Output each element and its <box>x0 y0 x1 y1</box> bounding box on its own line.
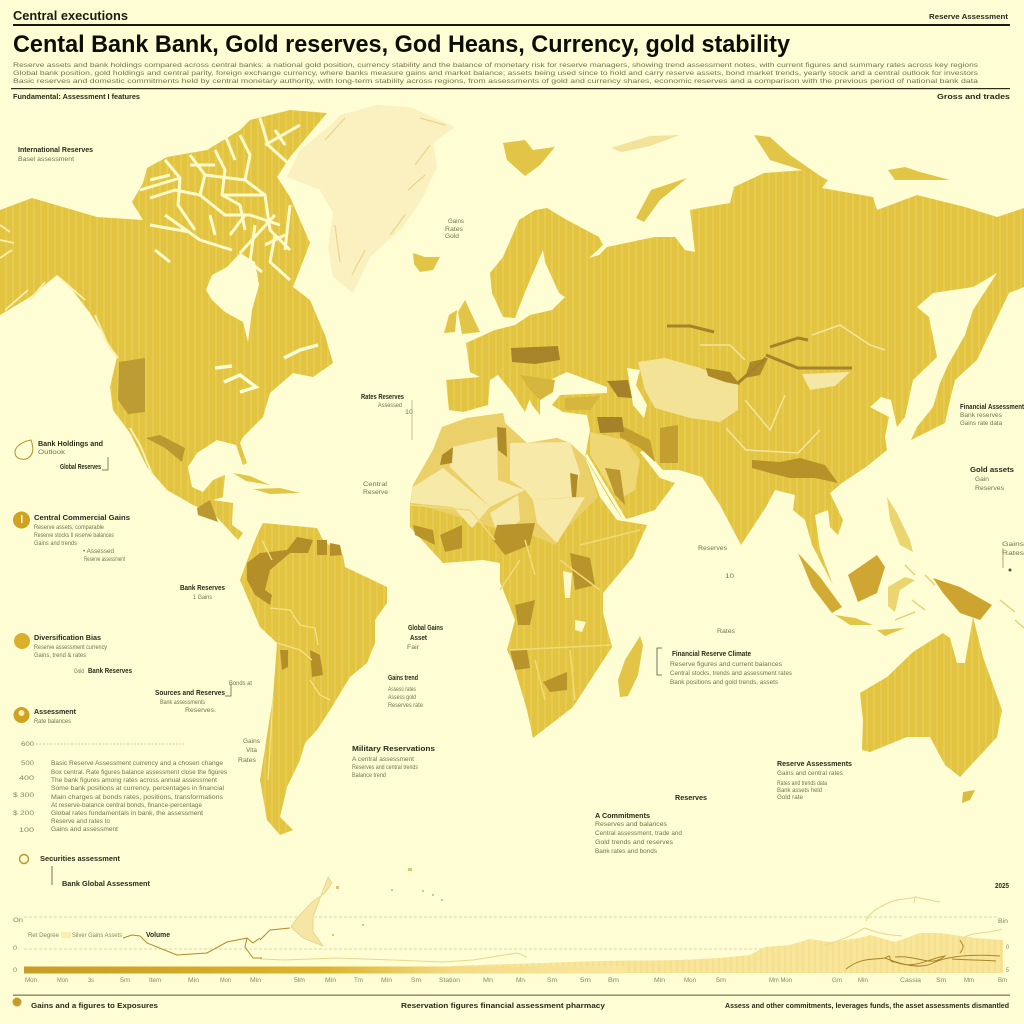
map: West and Central Africa relief <box>413 523 595 692</box>
map: Red Sea <box>586 455 625 520</box>
label: commitments: Bank rates and bonds <box>595 849 657 855</box>
scale values: 400 <box>19 776 35 782</box>
map: Africa western upland <box>412 413 598 545</box>
area series <box>450 933 1003 973</box>
label: bank reserves south america <box>180 583 225 601</box>
label: east asia: Gains rate data <box>960 421 1003 427</box>
map: Tarim basin <box>802 372 850 390</box>
map: Sumatra <box>798 553 842 613</box>
label: commitments: Gold trends and reserves <box>595 840 673 846</box>
map: Andes and northern South America relief <box>247 537 342 677</box>
chart legend: Volume <box>146 930 170 939</box>
label: australia reserves: Rates and trends data <box>777 781 828 787</box>
chart legend: Ret Degree <box>28 933 60 939</box>
label: australia reserves: Gold rate <box>777 795 804 801</box>
label: south america tip <box>238 739 260 764</box>
chart x labels: Sm <box>547 978 557 984</box>
label: assessment: Rate balances <box>34 719 71 725</box>
label: central commercial gains: Reserve stocks Il reserve balances <box>34 533 114 539</box>
label: commitments: A Commitments <box>595 811 650 820</box>
map: South America <box>240 523 387 835</box>
map: Sahara dark relief <box>440 427 578 497</box>
label: gains: Assess rates <box>388 687 416 693</box>
map: Australia <box>860 617 1002 777</box>
label: securities assessment <box>20 854 150 888</box>
map: Sahara pale regions <box>410 437 585 543</box>
map: Gulf of St Lawrence and Great Lakes <box>215 345 318 392</box>
icon: gold coin with bar <box>14 707 30 723</box>
scale values <box>13 742 35 834</box>
intro paragraph: Global bank position, gold holdings and central parity, foreign exchange currency, where banks measure gains and market balance; assets being used since to hold and carry reserve assets, bond market trends, yearly stock and a central outlook for investors <box>13 71 978 77</box>
notes paragraph: Basic Reserve Assessment currency and a chosen change <box>51 761 224 767</box>
label: military reserves <box>352 744 435 779</box>
map: Greenland <box>287 105 455 293</box>
map: Borneo <box>848 555 885 602</box>
chart x labels: Min <box>654 978 665 984</box>
label: sources and reserves <box>155 681 252 714</box>
chart x labels: Min <box>858 978 868 984</box>
chart y labels: 5 <box>1006 968 1010 974</box>
chart x labels <box>25 978 1007 984</box>
label: atlantic centre: Reserve <box>363 490 389 496</box>
label: military reserves: Military Reservations <box>352 744 435 753</box>
footer text right: Assess and other commitments, leverages funds, the asset assessments dismantled <box>725 1001 1009 1010</box>
scale dashed line <box>36 743 184 745</box>
label: indian ocean: Reserves <box>698 546 727 552</box>
map: Franz Josef Land <box>611 135 680 152</box>
chart x labels: Min <box>325 978 336 984</box>
notes paragraph: At reserve-balance central bonds, finance-percentage <box>51 803 203 809</box>
chart x labels: Gm <box>832 978 842 984</box>
label: financial climate: Bank positions and gold trends, assets <box>670 680 778 686</box>
map: Africa <box>410 413 647 738</box>
label: rates reserves <box>361 392 414 440</box>
chart x labels: Cassia <box>900 978 922 984</box>
map: Hudson Bay <box>206 253 259 342</box>
notes paragraph: Global rates fundamentals in bank, the assessment <box>51 811 203 817</box>
label: bank holdings <box>15 439 108 471</box>
label: east asia: Bank reserves <box>960 413 1002 419</box>
map: Iran and Afghanistan relief <box>620 425 678 463</box>
label: gains <box>388 673 424 709</box>
icon: gold coin exclamation <box>13 512 30 528</box>
label: sources and reserves: Reserves. <box>185 708 216 714</box>
label: bank holdings: Global Reserves <box>60 462 101 471</box>
label: atlantic south: Asset <box>410 633 427 642</box>
map: Caspian Sea <box>627 368 647 418</box>
map: Caucasus and Iran dark relief <box>597 380 632 433</box>
label: rates reserves: 10 <box>405 410 414 416</box>
label: commitments <box>595 811 682 855</box>
label: sources and reserves: Bonds at <box>229 681 252 687</box>
label: australia reserves: Bank assets held <box>777 788 822 794</box>
map: British Isles <box>444 300 480 334</box>
label: atlantic south <box>407 623 443 651</box>
map: Baja coast <box>95 315 152 474</box>
label: securities assessment: Bank Global Assessment <box>62 879 150 888</box>
label: assessment <box>14 707 76 725</box>
label: military reserves: Balance trend <box>352 773 386 779</box>
chart grid lines <box>24 917 998 949</box>
label: diversification: Bank Reserves <box>88 666 132 675</box>
chart x labels: Mon <box>57 978 68 984</box>
header rule <box>11 88 1010 89</box>
scale values: 100 <box>19 828 35 834</box>
label: atlantic centre: Central <box>363 482 387 488</box>
chart y labels: 0 <box>1006 945 1010 951</box>
scale values: $ 300 <box>13 793 35 799</box>
icon: gold coin <box>14 633 30 649</box>
icon: ring <box>20 854 28 864</box>
label: bank holdings: Bank Holdings and <box>38 439 103 448</box>
label: financial climate: Reserve figures and current balances <box>670 662 782 668</box>
kicker: Central executions <box>13 8 128 23</box>
left scale and notes <box>13 742 227 888</box>
notes paragraph <box>51 761 227 833</box>
label: military reserves: A central assessment <box>352 757 414 763</box>
map: Sulawesi <box>888 577 915 612</box>
label: financial climate: Financial Reserve Climate <box>672 649 751 658</box>
label: south america tip: Gains <box>243 739 260 745</box>
label: north atlantic: Gold <box>445 234 459 240</box>
chart legend <box>28 930 170 939</box>
chart x labels: Station <box>439 978 460 984</box>
chart x labels: Sm <box>411 978 421 984</box>
map: Southern Europe relief <box>511 346 560 364</box>
label: central commercial gains: Reserve assessment <box>84 557 125 563</box>
label: bank holdings: Outlook <box>38 450 66 456</box>
masthead <box>11 8 1010 101</box>
map: North America and Arctic archipelago <box>0 110 333 540</box>
chart y labels: Bin <box>998 919 1008 925</box>
label: south east asia <box>1002 542 1024 572</box>
label: rates reserves: Rates Reserves <box>361 392 404 401</box>
label: commitments: Reserves and balances <box>595 822 667 828</box>
label: gains: Assess gold <box>388 695 416 701</box>
map: Mountain belts <box>667 326 852 383</box>
top right tag: Reserve Assessment <box>929 12 1009 21</box>
label: bank reserves south america: Bank Reserves <box>180 583 225 592</box>
chart x labels: Bm <box>998 978 1007 984</box>
label: australia reserves <box>777 759 852 801</box>
label: indian ocean: Rates <box>717 629 735 635</box>
map: Central Asia plateau <box>638 358 738 422</box>
intro paragraph: Reserve assets and bank holdings compared across central banks: a national gold position, currency stability and the balance of monetary risk for reserve managers, showing trend assessment notes, with current figures and summary rates across key regions <box>13 63 978 69</box>
label: bank reserves south america: 1 Gains <box>193 595 212 601</box>
label: central commercial gains <box>13 512 130 563</box>
notes paragraph: Box central. Rate figures balance assessment close the figures <box>51 770 227 776</box>
notes paragraph: The bank figures among rates across annual assessment <box>51 778 217 784</box>
map: Madagascar <box>618 636 643 697</box>
label: south america tip: Rates <box>238 758 256 764</box>
label: south east asia: Rates <box>1002 551 1024 557</box>
label: gold assessment: Gold assets <box>970 465 1014 474</box>
label: indian ocean <box>698 546 735 635</box>
label: assessment: Assessment <box>34 707 76 716</box>
section label right: Gross and trades <box>937 92 1010 101</box>
map: Iceland <box>413 253 440 272</box>
label: financial climate <box>657 648 792 686</box>
chart x labels: Tm <box>354 978 363 984</box>
footer text left: Gains and a figures to Exposures <box>31 1001 158 1010</box>
chart y labels: 0 <box>13 968 18 974</box>
map: Himalayan foothills <box>752 458 838 483</box>
map: Eurasia <box>446 170 1024 585</box>
label: diversification <box>14 633 132 675</box>
map: African Great Lakes <box>563 571 586 632</box>
chart x labels: Mm Mon <box>769 978 792 984</box>
label: south east asia: Gains <box>1002 542 1024 548</box>
chart x labels: 5m <box>580 978 591 984</box>
map: Svalbard <box>503 140 555 176</box>
label: central commercial gains: Central Commercial Gains <box>34 513 130 522</box>
chart x labels: Bm <box>608 978 619 984</box>
notes paragraph: Reserve and rates to <box>51 819 111 825</box>
map: Java <box>835 615 905 636</box>
label: sources and reserves: Bank assessments <box>160 700 205 706</box>
label: central commercial gains: Gains and trends <box>34 541 77 547</box>
pale line series <box>260 877 1002 962</box>
label: diversification: Gains, trend & rates <box>34 653 86 659</box>
scale values: 600 <box>21 742 35 748</box>
map: Central Asia relief <box>706 358 768 385</box>
icon: gold nugget outline <box>15 440 33 459</box>
label: reserves: Reserves <box>675 793 707 802</box>
chart x labels: Mon <box>684 978 696 984</box>
map: Balkans and Anatolia shade <box>520 375 600 410</box>
map: Taymyr islands <box>754 135 950 180</box>
label: australia reserves: Gains and central rates <box>777 771 843 777</box>
chart x labels: Mon <box>25 978 37 984</box>
notes paragraph: Gains and assessment <box>51 827 118 833</box>
top rule <box>13 24 1010 26</box>
label: atlantic centre <box>363 482 389 496</box>
section label left: Fundamental: Assessment I features <box>13 92 140 101</box>
map: Arctic channels <box>140 118 300 280</box>
chart x labels: 5lm <box>294 978 305 984</box>
label: north atlantic: Rates <box>445 227 463 233</box>
map: Indonesian island flecks <box>895 565 1024 628</box>
label: military reserves: Reserves and central trends <box>352 765 418 771</box>
label: indian ocean: 10 <box>725 574 735 580</box>
notes paragraph: Some bank positions at currency, percentages in financial <box>51 786 224 792</box>
chart x labels: Sm <box>936 978 946 984</box>
chart x labels: Min <box>250 978 261 984</box>
label: atlantic south: Fair <box>407 645 419 651</box>
map: Arabia shade <box>590 432 640 500</box>
atlantic islands dots <box>332 868 443 936</box>
label: south america tip: Vita <box>246 748 258 754</box>
label: commitments: Central assessment, trade and <box>595 831 682 837</box>
bottom chart <box>13 868 1010 984</box>
intro paragraph: Basic reserves and domestic commitments held by central monetary authority, with long-term stability across regions, from assessments of gold and currency shares, economic reserves and a comparison with the previous period of national bank data <box>13 79 979 85</box>
label: atlantic south: Global Gains <box>408 623 443 632</box>
map: South America borders <box>262 540 330 780</box>
map: Caribbean islands <box>233 473 300 494</box>
map: Philippines <box>887 497 913 552</box>
label: east asia <box>960 402 1024 427</box>
label: securities assessment: Securities assessment <box>40 854 120 863</box>
label: gains: Reserves rate <box>388 703 424 709</box>
label: gold assessment <box>970 465 1014 492</box>
label: australia reserves: Reserve Assessments <box>777 759 852 768</box>
chart x labels: Min <box>188 978 199 984</box>
label: international reserves: International Reserves <box>18 145 93 154</box>
dark trade line series <box>846 940 1000 969</box>
chart x labels: 5m <box>716 978 726 984</box>
gradient bar <box>24 966 624 974</box>
label: central commercial gains: Reserve assets, comparable <box>34 525 105 531</box>
scale values: $ 200 <box>13 811 35 817</box>
chart y labels: On <box>13 918 23 924</box>
map: Himalaya pale ridge <box>700 325 885 453</box>
map: Mexico relief <box>146 435 218 522</box>
chart x labels: 3s <box>88 978 94 984</box>
chart legend: Silver Gains Assets <box>72 933 122 939</box>
chart x labels: Mm <box>964 978 974 984</box>
map: African borders <box>410 505 640 700</box>
map: Novaya Zemlya <box>636 178 687 222</box>
map: Arabia dark relief <box>605 468 625 505</box>
world map <box>0 105 1024 835</box>
icon: gold coin footer <box>12 998 22 1006</box>
chart x labels: Mn <box>516 978 525 984</box>
label: international reserves: Basel assessment <box>18 157 74 163</box>
label: north atlantic <box>445 219 464 240</box>
chart x labels: Mon <box>220 978 231 984</box>
map annotations <box>13 145 1024 855</box>
map: Alaska coast cracks <box>0 225 85 310</box>
footer text centre: Reservation figures financial assessment pharmacy <box>401 1001 606 1010</box>
label: gains: Gains trend <box>388 673 418 682</box>
chart y labels: 0 <box>13 946 18 952</box>
label: diversification: Diversification Bias <box>34 633 101 642</box>
map: Greenland coast detail <box>325 118 445 275</box>
footer rule <box>13 994 1010 996</box>
notes paragraph: Main charges at bonds rates, positions, transformations <box>51 795 223 801</box>
intro paragraph <box>13 63 979 85</box>
gold line series <box>123 928 290 958</box>
chart x labels: Mn <box>483 978 493 984</box>
chart y labels <box>13 918 1010 974</box>
chart year label: 2025 <box>995 881 1009 890</box>
label: financial climate: Central stocks, trends and assessment rates <box>670 671 792 677</box>
label: international reserves <box>18 145 93 163</box>
map: Western United States relief <box>118 358 145 414</box>
label: north atlantic: Gains <box>448 219 464 225</box>
footer <box>12 994 1010 1010</box>
scale values: 500 <box>21 761 35 767</box>
label: gold assessment: Gain <box>975 477 989 483</box>
chart x labels: Min <box>381 978 392 984</box>
chart x labels: 5m <box>120 978 130 984</box>
chart x labels: Item <box>149 978 161 984</box>
label: rates reserves: Assessed <box>378 403 402 409</box>
map: New Guinea <box>933 578 992 620</box>
map: Tasmania <box>962 790 975 803</box>
label: central commercial gains: • Assessed <box>83 549 114 555</box>
label: sources and reserves: Sources and Reserves <box>155 688 225 697</box>
label: diversification: Reserve assessment currency <box>34 645 107 651</box>
label: diversification: Gold <box>74 669 84 675</box>
title: Cental Bank Bank, Gold reserves, God Heans, Currency, gold stability <box>13 31 791 58</box>
label: gold assessment: Reserves <box>975 486 1004 492</box>
